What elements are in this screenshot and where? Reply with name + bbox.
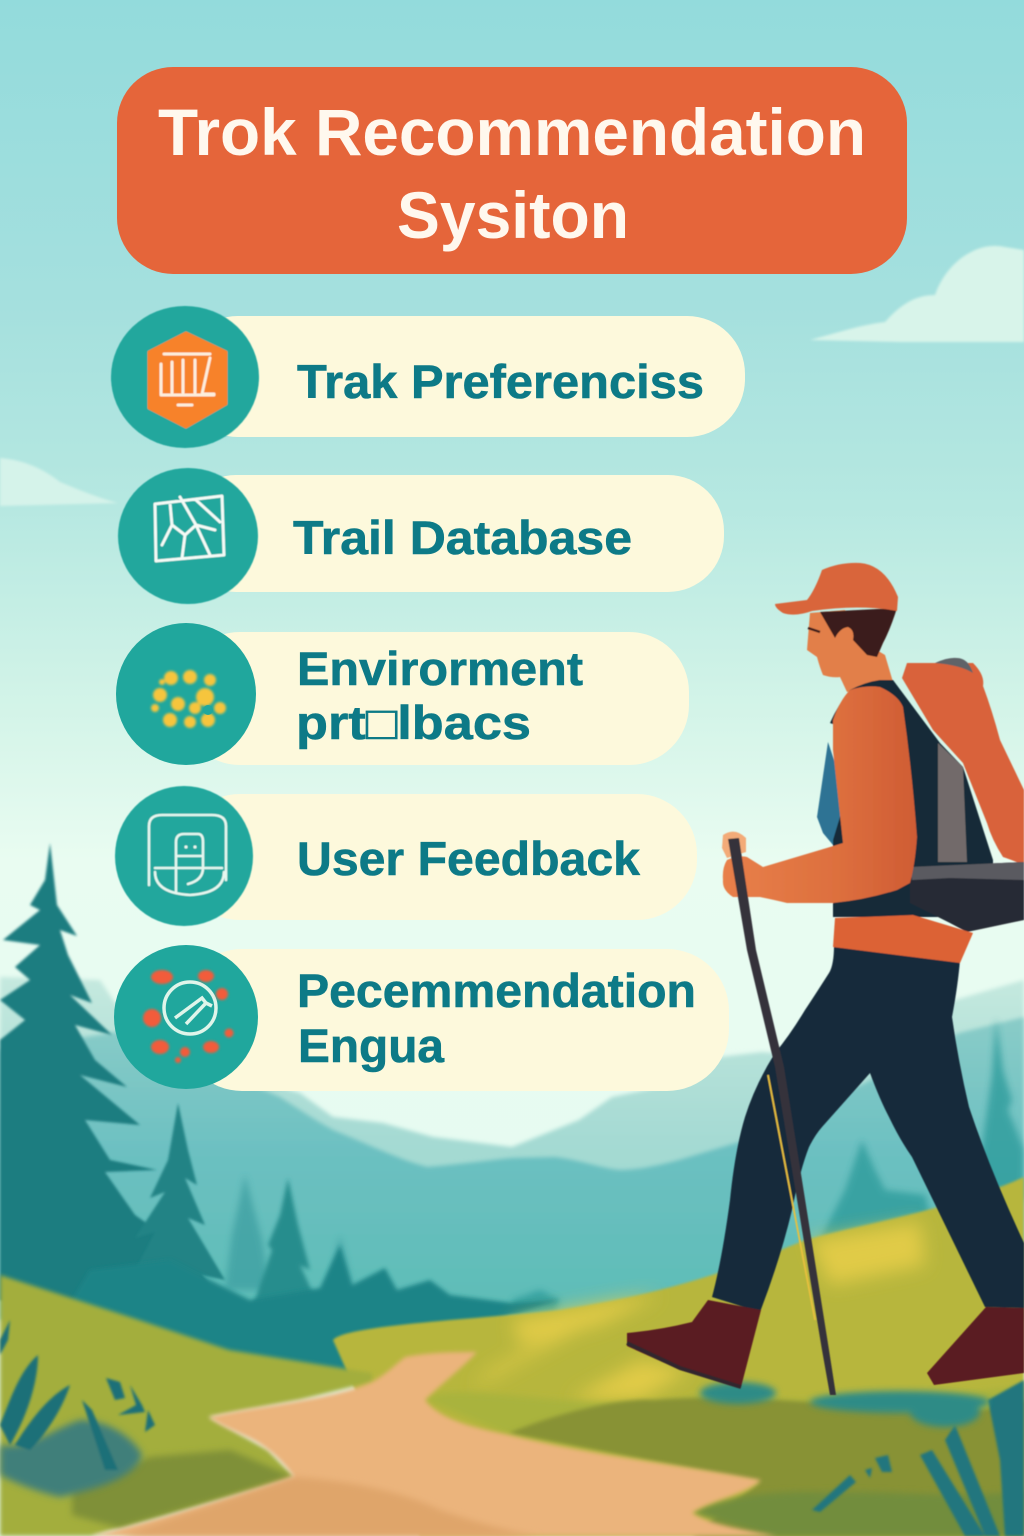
label: Trak Preferenciss [297, 355, 704, 408]
meadow right dark [509, 1398, 1024, 1536]
hip roll [910, 862, 1024, 932]
hiking pole [728, 838, 836, 1395]
cap [775, 563, 898, 615]
meadow shadow right [692, 1490, 1024, 1536]
far forest right [512, 1018, 1024, 1316]
vest [830, 680, 993, 917]
label line 2: Engua [298, 1019, 445, 1072]
backpack [902, 663, 1024, 865]
grass right [812, 1380, 1024, 1536]
forest mass [60, 1245, 560, 1380]
hiker figure [627, 563, 1024, 1395]
cloud right [810, 246, 1024, 342]
title banner [117, 67, 907, 274]
hair [820, 608, 897, 657]
grey back panel [938, 743, 967, 862]
step 5: Pecemmendation Engua [114, 945, 729, 1091]
mountains mid [0, 1017, 1024, 1320]
hiking trousers [712, 945, 1024, 1312]
thumb [722, 832, 746, 858]
cloud left [0, 458, 118, 506]
title text line 1: Trok Recommendation [158, 95, 866, 169]
step 3: Envirorment prt□lbacs [116, 623, 689, 765]
meadow far right [333, 1177, 1024, 1536]
bush left [0, 1320, 155, 1497]
step 2: Trail Database [118, 468, 724, 604]
label: Trail Database [293, 511, 632, 564]
second pine tree [110, 1103, 250, 1350]
path shadow [120, 1477, 540, 1536]
icon: preferences badge [111, 306, 259, 448]
eye [808, 628, 820, 632]
meadow left shadow [72, 1450, 294, 1528]
icon: trail map [118, 468, 258, 604]
shirt hem [833, 915, 973, 963]
title text line 2: Sysiton [397, 178, 629, 252]
faint far trees [225, 1175, 352, 1300]
icon: feedback device [115, 786, 253, 926]
meadow yellow highlights [470, 1222, 925, 1400]
label line 2: prt□lbacs [296, 696, 531, 749]
neck and head [807, 610, 893, 692]
arm [723, 686, 917, 903]
third pine tree [225, 1178, 330, 1370]
icon: environment cluster [116, 623, 256, 765]
meadow right lower [425, 1385, 1024, 1536]
backpack top [935, 658, 973, 673]
step 4: User Feedback [115, 786, 697, 926]
boot right [927, 1307, 1024, 1385]
dirt path [91, 1352, 777, 1536]
boot sole [627, 1343, 741, 1387]
big pine tree [0, 843, 240, 1360]
icon: recommendation engine [114, 945, 258, 1089]
label line 1: Envirorment [297, 642, 583, 695]
boot left [627, 1300, 761, 1387]
mountains far [0, 977, 1024, 1300]
step 1: Trak Preferenciss [111, 306, 745, 448]
blue shirt [817, 742, 846, 845]
label line 1: Pecemmendation [297, 964, 696, 1017]
foot shadows [700, 1382, 990, 1427]
meadow left [0, 1275, 372, 1536]
label: User Feedback [297, 832, 641, 885]
